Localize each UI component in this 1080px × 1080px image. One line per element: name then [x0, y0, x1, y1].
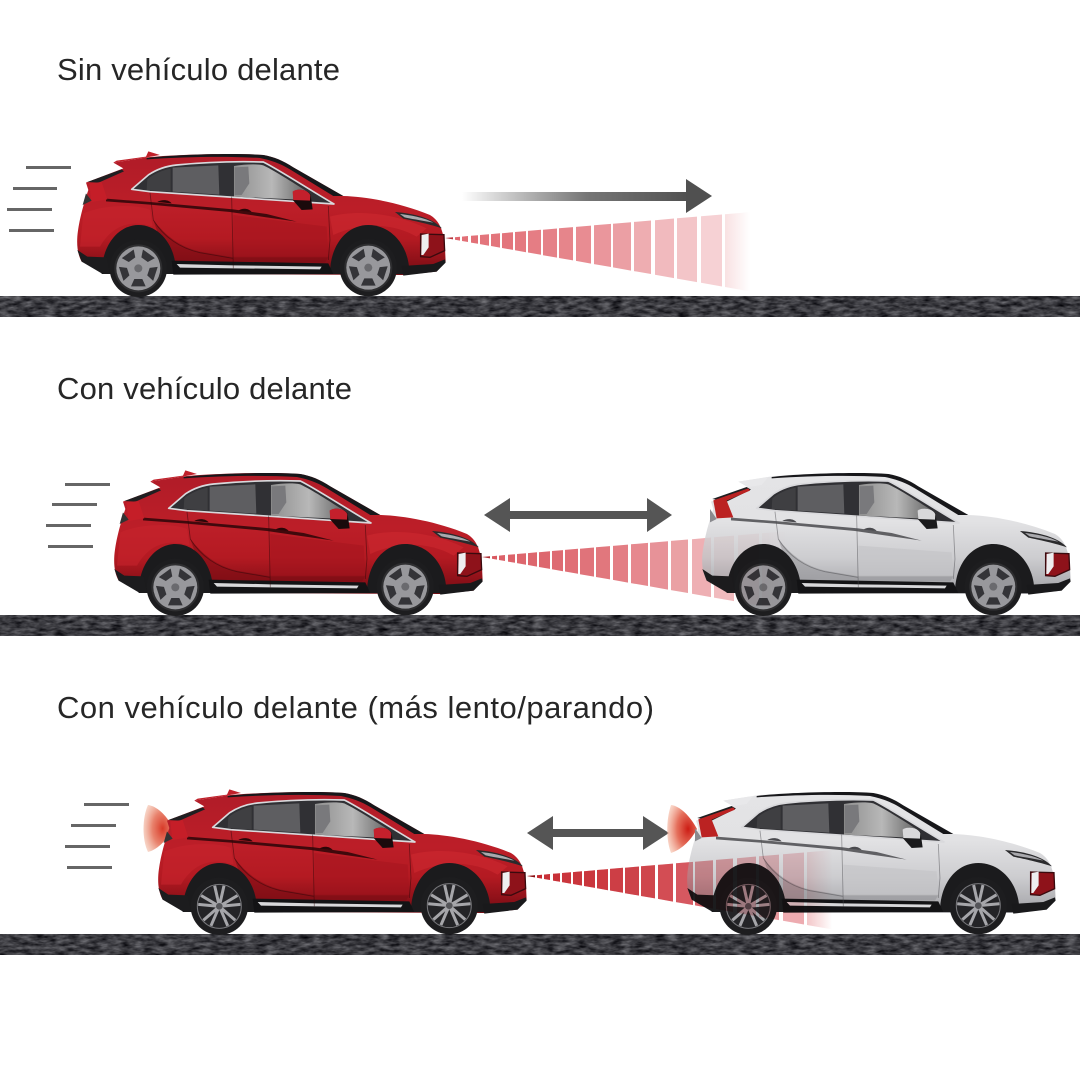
road: [0, 296, 1080, 317]
motion lines: [46, 484, 110, 546]
brake glow: red car: [144, 805, 173, 852]
scene 3: slower or stopping vehicle ahead: [0, 789, 1080, 955]
radar beam: [482, 531, 787, 610]
red car: [114, 470, 483, 616]
red car: [77, 151, 446, 297]
radar beam overlay on white car: [527, 850, 832, 929]
title: con vehículo delante, más lento: Con vehículo delante (más lento/parando): [57, 690, 654, 725]
radar beam: [527, 850, 832, 929]
road: [0, 934, 1080, 955]
motion lines: [65, 804, 129, 868]
road: [0, 615, 1080, 636]
scene 1: no vehicle ahead: [0, 151, 1080, 317]
title: con vehículo delante: Con vehículo delante: [57, 371, 352, 406]
white car: [687, 792, 1056, 935]
brake glow: white car: [667, 805, 697, 853]
direction arrow: [462, 179, 712, 213]
red car: [158, 789, 527, 935]
scene 2: vehicle ahead: [0, 470, 1080, 636]
white car: [702, 473, 1071, 616]
distance arrow: [484, 498, 672, 532]
distance arrow: [527, 816, 669, 850]
radar beam overlay on white car: [482, 531, 787, 610]
title: sin vehículo delante: Sin vehículo delante: [57, 52, 340, 87]
motion lines: [7, 168, 71, 230]
radar beam: [445, 212, 750, 291]
